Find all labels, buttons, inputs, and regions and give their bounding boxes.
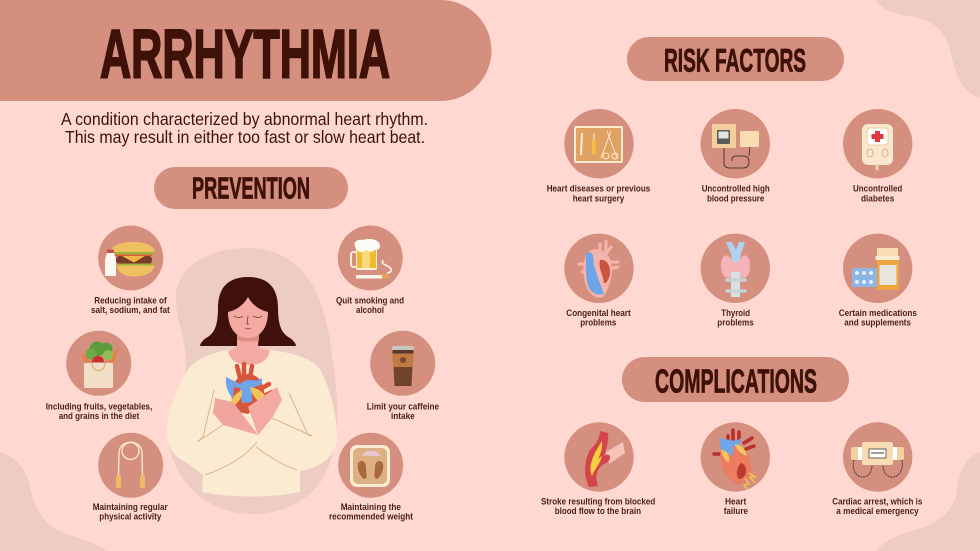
icon: beer and cigarette [351, 239, 391, 278]
icon: surgical tray [575, 127, 622, 162]
icon: blocked artery [585, 431, 625, 487]
prevention item: caffeine: intake [391, 411, 415, 421]
risk factor: diabetes: diabetes [861, 193, 894, 203]
risk factor: heart surgery: Heart diseases or previous [547, 184, 650, 194]
risk factor: congenital heart problems: Congenital heart [566, 308, 631, 318]
complication: cardiac arrest: Cardiac arrest, which is [832, 496, 922, 506]
prevention item: fruits and vegetables [46, 331, 152, 421]
risk factors heading [627, 37, 844, 81]
risk factor: high blood pressure: blood pressure [707, 193, 764, 203]
risk factor: heart surgery [547, 109, 650, 203]
prevention heading: PREVENTION [192, 171, 310, 206]
subtitle text: A condition characterized by abnormal heart rhythm. [61, 109, 428, 129]
complications heading [622, 357, 849, 402]
risk factor: heart surgery: heart surgery [573, 193, 625, 203]
complication: stroke: blood flow to the brain [555, 506, 641, 516]
prevention item: fruits and vegetables: Including fruits, vegetables, [46, 401, 152, 411]
risk factor: thyroid problems: problems [717, 318, 754, 328]
risk factor: medications: and supplements [844, 318, 911, 328]
icon: defibrillator [851, 442, 904, 477]
risk factor: medications [839, 234, 917, 328]
prevention item: quit smoking and alcohol [336, 226, 404, 315]
icon: pills and bottle [852, 248, 900, 290]
icon: coffee cup [392, 346, 414, 386]
risk factor: medications: Certain medications [839, 308, 917, 318]
icon: bathroom scale [350, 445, 390, 487]
icon: jump rope [116, 442, 145, 488]
prevention heading [154, 167, 348, 209]
complication: stroke [541, 422, 656, 516]
risk factors heading: RISK FACTORS [664, 43, 806, 79]
title banner [0, 0, 491, 101]
complication: heart failure: failure [724, 506, 748, 516]
prevention item: weight: recommended weight [329, 512, 413, 522]
prevention item: caffeine [367, 331, 439, 421]
icon: grocery bag [81, 342, 119, 388]
icon: heart cross-section [579, 241, 618, 298]
prevention item: diet [91, 226, 170, 315]
icon: glucose device [862, 124, 893, 170]
icon: burger and salt [105, 242, 155, 276]
prevention item: weight: Maintaining the [341, 502, 401, 512]
icon: failing heart [714, 430, 755, 489]
risk factor: congenital heart problems: problems [580, 318, 616, 328]
risk factor: high blood pressure: Uncontrolled high [702, 184, 770, 194]
illustration: woman holding a heart [167, 248, 338, 514]
prevention item: quit smoking and alcohol: alcohol [356, 305, 384, 315]
heart held in hands [226, 364, 272, 414]
risk factor: diabetes: Uncontrolled [853, 184, 903, 194]
risk factor: thyroid problems [701, 234, 770, 328]
subtitle text [61, 109, 428, 147]
subtitle text: This may result in either too fast or slow heart beat. [65, 127, 425, 147]
complication: heart failure [701, 422, 770, 516]
prevention item: diet: Reducing intake of [94, 295, 167, 305]
prevention item: caffeine: Limit your caffeine [367, 401, 439, 411]
title banner: ARRHYTHMIA [100, 15, 390, 92]
icon: blood pressure monitor [712, 124, 759, 168]
prevention item: diet: salt, sodium, and fat [91, 305, 170, 315]
risk factor: high blood pressure [701, 109, 770, 203]
complications heading: COMPLICATIONS [655, 362, 817, 399]
prevention item: physical activity: physical activity [99, 512, 162, 522]
prevention item: physical activity [93, 433, 168, 522]
complication: heart failure: Heart [725, 496, 746, 506]
prevention item: weight [329, 433, 413, 522]
risk factor: diabetes [843, 109, 912, 203]
prevention item: fruits and vegetables: and grains in the diet [59, 411, 139, 421]
prevention item: physical activity: Maintaining regular [93, 502, 168, 512]
crossed hands [213, 387, 282, 435]
risk factor: thyroid problems: Thyroid [721, 308, 750, 318]
icon: thyroid [721, 242, 750, 297]
prevention item: quit smoking and alcohol: Quit smoking and [336, 295, 404, 305]
complication: stroke: Stroke resulting from blocked [541, 496, 656, 506]
complication: cardiac arrest: a medical emergency [836, 506, 919, 516]
risk factor: congenital heart problems [564, 234, 634, 328]
complication: cardiac arrest [832, 422, 922, 516]
